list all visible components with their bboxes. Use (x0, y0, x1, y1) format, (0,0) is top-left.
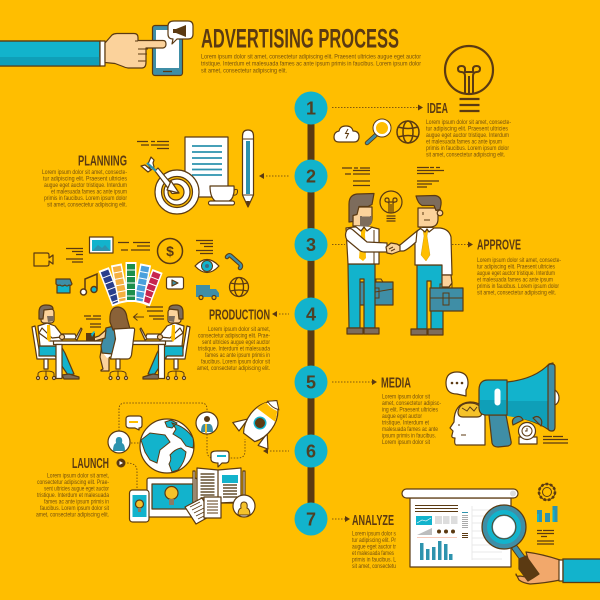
arrow (134, 314, 144, 320)
icon: globe (230, 278, 248, 296)
title: ADVERTISING PROCESS (201, 24, 399, 54)
text: media: ipsum primis in faucibus. (382, 432, 436, 440)
small bulb (380, 191, 402, 221)
heading: planning: PLANNING (78, 152, 127, 170)
text: approve: augue eget auctor tristique. Interdum (477, 270, 555, 277)
speech bubbles (126, 416, 229, 467)
heading: production: PRODUCTION (209, 306, 270, 324)
text: approve (477, 257, 561, 296)
tablet (147, 478, 197, 517)
globe (140, 419, 194, 473)
text: planning: augue eget auctor tristique. Interdum (44, 182, 127, 189)
illustration: meeting table (32, 305, 190, 380)
step 4: 4 (306, 304, 316, 324)
user circles (108, 412, 218, 453)
intro text: tristique. Interdum et malesuada fames ac ante ipsum primis in faucibus. Lorem ipsum dolor (201, 60, 422, 68)
icon: gear (539, 484, 555, 500)
icon: video button (166, 277, 184, 289)
text: production: tristique. Interdum et malesuada (198, 346, 270, 352)
step 1: 1 (306, 98, 316, 118)
icon: truck (196, 285, 219, 300)
step 7 (294, 502, 328, 536)
text: launch: faucibus. Lorem ipsum dolor sit (40, 505, 109, 512)
text: idea: augue eget auctor tristique. Interdum (426, 132, 509, 139)
text: approve: Lorem ipsum dolor sit amet, consecte- (477, 257, 561, 264)
text: analyze: et malesuada fames (352, 550, 394, 557)
text: media: malesuada fames ac ante (382, 426, 438, 433)
illustration: analyze board (402, 484, 600, 584)
heading: media: MEDIA (381, 374, 411, 392)
intro text: sit amet, consectetur adipiscing elit. (201, 68, 287, 74)
icon: cloud (334, 126, 359, 142)
icon: dollar coin (158, 238, 182, 264)
heading: idea: IDEA (427, 100, 448, 117)
text: media: tristique. Interdum et (382, 420, 429, 426)
notes (137, 142, 169, 148)
sleeve (559, 559, 600, 582)
right man (386, 196, 452, 335)
step 3: 3 (306, 235, 316, 255)
text: media (382, 394, 441, 446)
horn (507, 363, 559, 431)
magnifier and hand (482, 505, 560, 584)
text: launch: amet, consectetur adipiscing elit. (36, 512, 109, 518)
illustration: planning (137, 130, 254, 214)
text: analyze: tur adipiscing elit. Pr (352, 537, 397, 544)
text: media: amet, consectetur adipisc- (382, 400, 441, 407)
heading: analyze: ANALYZE (352, 512, 394, 529)
table (54, 341, 166, 378)
text: idea (426, 119, 511, 158)
left man (346, 194, 387, 334)
step 5 (294, 366, 328, 398)
text: media: Lorem ipsum dolor sit (382, 394, 430, 400)
left person (32, 305, 82, 380)
icon: globe (397, 121, 419, 143)
illustration: launch (108, 387, 294, 524)
megaphone body (479, 380, 507, 415)
text: planning: et malesuada fames ac ante ipsum (51, 188, 127, 196)
text: production: faucibus. Lorem ipsum dolor sit (201, 358, 270, 366)
icon: magnifier (367, 119, 391, 143)
pencil (242, 130, 254, 207)
illustration: production icons (34, 237, 248, 306)
icon: store (56, 279, 72, 293)
handle (489, 415, 511, 447)
intro text (201, 54, 422, 74)
icon: picture (90, 237, 113, 253)
step 7: 7 (306, 510, 316, 530)
text: production: consectetur adipiscing elit. Prae- (198, 332, 270, 340)
icon: light bulb (445, 46, 493, 111)
text: production: sent ultricies augue eget auctor (202, 339, 271, 346)
icon: hand tapping phone (0, 21, 193, 76)
text: analyze (352, 530, 397, 570)
text: planning: primis in faucibus. Lorem ipsum dolor (44, 195, 128, 202)
text: launch: consectetur adipiscing elit. Prae- (37, 479, 109, 486)
text: approve: et malesuada fames ac ante ipsum (477, 276, 553, 284)
open book (193, 468, 245, 503)
woman (86, 307, 135, 380)
text: planning: Lorem ipsum dolor sit amet, consecte- (42, 169, 127, 176)
text: idea: Lorem ipsum dolor sit amet, consecte- (426, 119, 511, 126)
text: launch: Lorem ipsum dolor sit amet, (47, 472, 109, 480)
step 6: 6 (306, 442, 316, 462)
dotted links (119, 403, 245, 489)
rocket (231, 387, 294, 451)
icon: camera (34, 253, 53, 266)
step 2 (294, 160, 328, 192)
text: launch: fames ac ante ipsum primis in (44, 498, 109, 506)
text: launch (36, 472, 110, 518)
notes (543, 436, 568, 443)
alarm clock (512, 416, 542, 444)
notes above men (342, 168, 444, 187)
text: idea: primis in faucibus. Lorem ipsum dolor (426, 145, 510, 152)
timeline (294, 92, 328, 536)
board (410, 498, 511, 567)
report content (415, 506, 502, 560)
phone (130, 490, 149, 522)
heading: approve: APPROVE (477, 236, 521, 254)
left briefcase (359, 279, 393, 305)
right person (140, 305, 190, 380)
text: launch: sent ultricies augue eget auctor (44, 486, 110, 492)
text: analyze: primis in faucibus. L (352, 556, 396, 564)
text: planning: tur adipiscing elit. Praesent ultricies (43, 176, 127, 182)
text: idea: et malesuada fames ac ante ipsum (426, 138, 502, 146)
text: idea: tur adipiscing elit. Praesent ultricies (426, 126, 508, 132)
play icon (116, 458, 126, 468)
step 2: 2 (306, 166, 316, 186)
icon: bars (537, 506, 558, 522)
text: media: ing elit. Praesent ultricies (382, 406, 438, 414)
step 3 (294, 228, 328, 261)
text: idea: sit amet, consectetur adipiscing elit. (426, 152, 505, 158)
notes (66, 240, 213, 262)
text: planning (42, 169, 128, 208)
text: planning: sit amet, consectetur adipiscing elit. (47, 202, 127, 208)
text: analyze: augue eget auctor tr (352, 544, 397, 550)
text: analyze: sit amet, consectetu (352, 563, 396, 570)
user circle (233, 495, 255, 517)
coffee cup (208, 186, 238, 205)
step 1 (294, 92, 328, 124)
target (141, 157, 199, 214)
step 4 (294, 298, 328, 330)
icon: colour swatches (99, 262, 163, 306)
illustration: megaphone (446, 363, 568, 447)
icon: phone (227, 255, 241, 268)
icon: music note (80, 274, 97, 295)
text: media: augue eget auctor (382, 413, 423, 420)
step 5: 5 (306, 372, 316, 392)
text: approve: primis in faucibus. Lorem ipsum dolor (477, 283, 560, 290)
text: approve: tur adipiscing elit. Praesent ultricies (477, 264, 555, 270)
icon: dollar coin: $ (166, 243, 174, 259)
arrows (259, 104, 473, 522)
text: production: fames ac ante ipsum primis in (205, 352, 270, 359)
text: launch: tristique. Interdum et malesuada (37, 492, 109, 499)
illustration: handshake (346, 191, 463, 335)
text: analyze: Lorem ipsum dolor s (352, 530, 396, 538)
text: media: Lorem ipsum dolor sit (382, 439, 430, 446)
heading: launch: LAUNCH (72, 455, 109, 472)
right briefcase (430, 275, 463, 311)
head with brain (450, 402, 485, 445)
speech bubble (446, 372, 468, 396)
step 6 (294, 434, 328, 468)
text: production: Lorem ipsum dolor sit amet, (208, 326, 270, 333)
text: approve: sit amet, consectetur adipiscing elit. (477, 290, 556, 296)
text: production (197, 326, 271, 372)
papers (185, 497, 221, 524)
notes (84, 307, 164, 327)
document (185, 137, 228, 197)
intro text: Lorem ipsum dolor sit amet, consectetur adipiscing elit. Praesent ultricies augue eget auctor (201, 54, 422, 60)
roller (402, 489, 518, 498)
text: production: amet, consectetur adipiscing elit. (197, 365, 270, 372)
icon: eye (195, 260, 219, 272)
notes (537, 530, 554, 544)
